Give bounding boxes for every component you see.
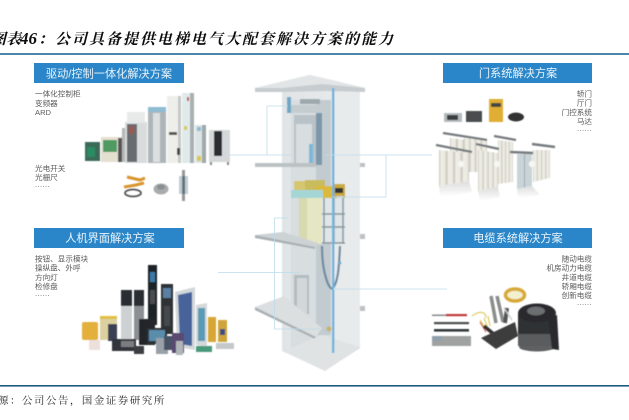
elevator shaft illustration xyxy=(255,75,365,371)
heading: human machine interface xyxy=(34,228,184,248)
roof xyxy=(255,75,365,92)
car frame xyxy=(322,198,345,243)
text block: drive products xyxy=(35,88,81,117)
shaft interior xyxy=(291,100,331,350)
title: 公司具备提供电梯电气大配套解决方案的能力 xyxy=(55,31,395,48)
text block: HMI products: ...... xyxy=(35,289,50,298)
sensor products xyxy=(124,170,188,201)
bottom rule xyxy=(0,385,629,387)
text block: cable products: 机房动力电缆 xyxy=(546,262,592,272)
lower hall door xyxy=(294,275,309,314)
text block: sensors: 光栅尺 xyxy=(35,172,58,182)
pit floor xyxy=(284,335,360,371)
text block: cable products: 创新电缆 xyxy=(562,290,592,300)
heading: cable system: 电缆系统解决方案 xyxy=(473,231,563,245)
floor plate 1 xyxy=(255,163,317,167)
text block: cable products: 随动电缆 xyxy=(562,254,592,264)
text block: sensors xyxy=(35,163,66,189)
heading: drive and control xyxy=(34,63,184,83)
operating panels xyxy=(82,265,234,355)
floor plate 3 xyxy=(255,296,322,337)
blue vertical pipe xyxy=(332,88,334,353)
text block: HMI products: 检修盘 xyxy=(35,281,58,291)
text block: door products: 轿门 xyxy=(577,88,592,98)
title: 46 xyxy=(19,29,38,48)
text block: sensors: ...... xyxy=(35,180,50,189)
shaft body xyxy=(282,90,360,371)
text block: door products: 马达 xyxy=(577,116,592,126)
door controllers xyxy=(444,99,524,122)
text block: HMI products: 方向灯 xyxy=(35,272,58,282)
text block: HMI products xyxy=(35,254,89,298)
text block: cable products: 轿厢电缆 xyxy=(562,281,592,291)
travelling cable xyxy=(322,246,340,289)
text block: cable products xyxy=(546,254,592,307)
cables xyxy=(432,289,559,352)
heading: human machine interface: 人机界面解决方案 xyxy=(65,231,155,245)
panel: door system xyxy=(436,63,592,201)
heading: cable system xyxy=(443,228,592,248)
top rule xyxy=(0,53,629,55)
text block: drive products: 变频器 xyxy=(35,98,58,108)
panel: drive and control xyxy=(34,63,230,201)
elevator car xyxy=(299,198,322,244)
text block: HMI products: 按钮、显示模块 xyxy=(35,254,89,264)
text block: cable products: 井道电缆 xyxy=(562,272,592,282)
heading: door system xyxy=(443,63,592,83)
text block: sensors: 光电开关 xyxy=(35,163,66,173)
upper hall door xyxy=(294,115,316,165)
text block: door products: ...... xyxy=(577,124,592,133)
text block: cable products: ...... xyxy=(577,298,592,307)
panel: cable system xyxy=(432,228,592,352)
landing doors xyxy=(436,133,555,201)
text block: door products: 厅门 xyxy=(577,98,592,108)
cabin machinery xyxy=(294,181,316,191)
text block: door products xyxy=(562,88,592,133)
right wall face xyxy=(332,90,360,362)
text block: HMI products: 操纵盘、外呼 xyxy=(35,262,81,272)
text block: drive products: 一体化控制柜 xyxy=(35,88,81,98)
heading: door system: 门系统解决方案 xyxy=(479,66,557,80)
top beam xyxy=(291,105,328,113)
floor plate 2 xyxy=(255,232,318,247)
text block: drive products: ARD xyxy=(35,108,52,117)
title: ： xyxy=(38,32,53,48)
heading: drive and control: 驱动/控制一体化解决方案 xyxy=(46,66,172,80)
connector lines xyxy=(218,106,447,329)
drive cabinets xyxy=(85,93,230,165)
panel: human machine interface xyxy=(34,228,234,355)
text block: door products: 门控系统 xyxy=(562,107,592,117)
